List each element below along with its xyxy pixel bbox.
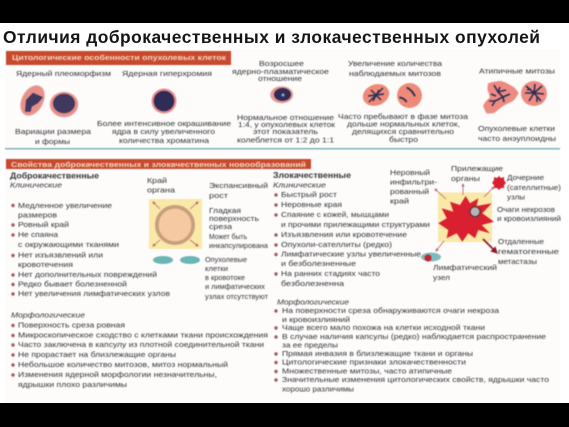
bullets: malignant morphological: Множественные митозы, часто атипичные bbox=[282, 366, 452, 376]
bullets: malignant morphological: хорошо различимы bbox=[282, 384, 354, 394]
icon: lymph node with metastasis bbox=[421, 252, 441, 262]
column: increased mitoses: дольше нормальных клеток, bbox=[347, 120, 460, 128]
labels: benign tumor: Экспансивный bbox=[209, 181, 268, 190]
labels: malignant tumor: Отдаленные bbox=[498, 237, 544, 246]
bullets: malignant clinical: На ранних стадиях часто bbox=[281, 269, 380, 278]
labels: tumor cells: узлах отсутствуют bbox=[205, 292, 269, 301]
labels: tumor cells: Опухолевые bbox=[205, 255, 247, 264]
bullets: malignant morphological: Прямая инвазия в близлежащие ткани и органы bbox=[282, 349, 473, 358]
column: nuclear hyperchromia bbox=[97, 69, 231, 145]
bullets: benign morphological: Небольшое количество митозов, митоз нормальный bbox=[18, 360, 228, 369]
bullets: malignant morphological: На поверхности среза обнаруживаются очаги некроза bbox=[282, 306, 500, 315]
labels: malignant tumor: узел bbox=[433, 273, 450, 282]
column: increased mitoses: наблюдаемых митозов bbox=[349, 69, 441, 78]
labels: malignant tumor: инфильтри- bbox=[390, 178, 438, 186]
icon: metaphase cell bbox=[360, 81, 392, 109]
labels: malignant tumor: метастазы bbox=[498, 257, 537, 266]
bullets: benign clinical: Нет изъязвлений или bbox=[18, 250, 103, 260]
diagram: benign tumor bbox=[147, 176, 269, 301]
labels: benign tumor: рост bbox=[209, 191, 229, 200]
labels: malignant tumor bbox=[390, 164, 561, 282]
column: nuclear-cytoplasmic ratio bbox=[232, 59, 336, 144]
panel: malignant: Морфологические bbox=[277, 298, 349, 306]
diagram: benign tumor: Край bbox=[147, 176, 167, 185]
icon: tumor star bbox=[438, 196, 494, 242]
bullets: benign morphological: Поверхность среза ровная bbox=[18, 320, 125, 330]
column: nuclear-cytoplasmic ratio: колеблется от 1:2 до 1:1 bbox=[237, 136, 334, 144]
column: atypical mitoses bbox=[478, 66, 556, 143]
icon: lymph nodes bbox=[153, 256, 200, 264]
bullets: malignant morphological: за ее пределы bbox=[282, 340, 338, 350]
column: increased mitoses: делящихся сравнительно bbox=[352, 127, 454, 136]
column: nuclear-cytoplasmic ratio: 1:4, у опухолевых клеток bbox=[238, 120, 336, 129]
column: nuclear hyperchromia: количества хроматина bbox=[119, 136, 210, 145]
labels: benign tumor: Может быть bbox=[209, 232, 247, 241]
bullets: malignant morphological: Значительные изменения цитологических свойств, ядрышки часто bbox=[282, 375, 549, 384]
bullets: benign clinical: с окружающими тканями bbox=[18, 240, 119, 249]
labels: malignant tumor: Прилежащие bbox=[451, 164, 503, 173]
column: nuclear hyperchromia: Более интенсивное окрашивание bbox=[97, 119, 231, 128]
labels: malignant tumor: Лимфатический bbox=[433, 263, 497, 272]
arrow: distant metastases bbox=[483, 239, 496, 252]
bullets: benign clinical bbox=[11, 201, 170, 298]
icon: irregular cell bbox=[16, 81, 49, 120]
bullets: benign clinical: Ровный край bbox=[18, 220, 69, 229]
diagram: benign tumor: органа bbox=[147, 186, 176, 194]
bullets: benign clinical: Медленное увеличение bbox=[18, 201, 112, 210]
labels: benign tumor: поверхность bbox=[209, 214, 259, 223]
column: nuclear-cytoplasmic ratio: Возросшее bbox=[259, 59, 304, 68]
bullets: benign morphological: ядрышки плохо различимы bbox=[18, 380, 127, 389]
column: nuclear pleomorphism bbox=[15, 69, 111, 146]
column: nuclear hyperchromia: ядра в силу увеличенного bbox=[112, 127, 215, 136]
bullets: malignant clinical bbox=[274, 190, 430, 288]
icon: hyperchromic cell bbox=[152, 88, 176, 114]
panel: malignant: Клинические bbox=[273, 180, 326, 190]
bullets: malignant clinical: безболезненна bbox=[281, 279, 345, 288]
labels: malignant tumor: рованный bbox=[390, 187, 429, 196]
bullets: benign clinical: Не спаяна bbox=[18, 230, 59, 239]
labels: benign tumor bbox=[209, 181, 269, 250]
column: increased mitoses bbox=[338, 59, 469, 144]
panel: malignant: Злокачественные bbox=[273, 171, 352, 180]
labels: benign tumor: Гладкая bbox=[209, 206, 241, 215]
bullets: benign morphological bbox=[11, 320, 268, 389]
labels: malignant tumor: край bbox=[390, 196, 409, 206]
panel: benign: Доброкачественные bbox=[10, 172, 100, 180]
panel: malignant bbox=[273, 171, 549, 394]
column: increased mitoses: Часто пребывают в фазе митоза bbox=[338, 112, 469, 121]
labels: benign tumor: среза bbox=[209, 222, 233, 231]
panel: cytological features bbox=[6, 51, 556, 146]
icon: satellite node bbox=[492, 176, 506, 190]
labels: benign tumor: инкапсулирована bbox=[209, 241, 269, 250]
bullets: benign clinical: Нет увеличения лимфатических узлов bbox=[18, 289, 170, 298]
bullets: malignant clinical: и прочими прилежащими структурами bbox=[281, 220, 430, 229]
labels: malignant tumor: (сателлитные) bbox=[507, 183, 561, 192]
bullets: malignant morphological: В случае наличия капсулы (редко) наблюдается распространение bbox=[282, 332, 546, 341]
diagram: malignant tumor bbox=[390, 164, 561, 282]
column: nuclear pleomorphism: и формы bbox=[35, 137, 70, 146]
icon: atypical mitosis lobed cell bbox=[483, 81, 519, 114]
labels: tumor cells: в кровотоке bbox=[205, 273, 245, 282]
column: atypical mitoses: Атипичные митозы bbox=[479, 66, 555, 76]
bullets: benign morphological: Часто заключена в капсулу из плотной соединительной ткани bbox=[18, 340, 264, 349]
title: Отличия доброкачественных и злокачественных опухолей bbox=[3, 27, 540, 47]
column: atypical mitoses: часто анэуплоидны bbox=[478, 134, 556, 143]
column: increased mitoses: Увеличение количества bbox=[348, 59, 443, 68]
panel: benign: Клинические bbox=[10, 180, 62, 190]
bullets: benign clinical: Нет дополнительных повреждений bbox=[18, 270, 157, 279]
labels: tumor cells: клетки bbox=[205, 264, 228, 273]
bullets: malignant morphological: Чаще всего мало похожа на клетки исходной ткани bbox=[282, 323, 485, 332]
icon: anaphase cell bbox=[397, 83, 422, 108]
panel: benign: Морфологические bbox=[11, 310, 85, 320]
icon: atypical mitosis round cell bbox=[521, 81, 547, 106]
labels: malignant tumor: органы bbox=[451, 174, 480, 183]
labels: malignant tumor: Неровный bbox=[390, 168, 430, 177]
column: nuclear-cytoplasmic ratio: этот показатель bbox=[253, 127, 318, 136]
heading bar: cytological features: Цитологические особенности опухолевых клеток bbox=[12, 53, 226, 62]
heading bar: properties: Свойства доброкачественных и злокачественных новообразований bbox=[11, 160, 306, 169]
bullets: malignant clinical: Лимфатические узлы увеличенные bbox=[281, 250, 421, 258]
bullets: malignant clinical: Изъязвления или кровотечение bbox=[281, 230, 407, 239]
bullets: malignant morphological: Цитологические признаки злокачественности bbox=[282, 358, 466, 366]
panel: benign bbox=[10, 172, 268, 389]
icon: necrosis focus bbox=[470, 207, 480, 217]
bullets: benign clinical: размеров bbox=[18, 210, 57, 220]
column: atypical mitoses: Опухолевые клетки bbox=[478, 124, 555, 133]
labels: tumor cells bbox=[205, 255, 269, 301]
bullets: malignant morphological: и кровоизлияний bbox=[282, 315, 350, 324]
icon: high ratio cell bbox=[270, 86, 293, 103]
bullets: malignant clinical: Быстрый рост bbox=[281, 190, 338, 199]
bullets: benign clinical: Редко бывает болезненной bbox=[18, 280, 127, 288]
column: nuclear-cytoplasmic ratio: ядерно-плазматическое bbox=[232, 67, 329, 76]
labels: malignant tumor: Очаги некрозов bbox=[497, 205, 555, 214]
column: nuclear pleomorphism: Ядерный плеоморфизм bbox=[16, 69, 111, 78]
bullets: malignant clinical: Спаяние с кожей, мышцами bbox=[281, 210, 389, 219]
bullets: benign morphological: Не прорастает на близлежащие органы bbox=[18, 350, 176, 359]
bullets: benign morphological: Микроскопическое сходство с клетками ткани происхождения bbox=[18, 330, 268, 340]
bullets: malignant morphological bbox=[274, 306, 549, 394]
column: nuclear-cytoplasmic ratio: отношение bbox=[258, 74, 302, 83]
labels: malignant tumor: и кровоизлияний bbox=[497, 214, 561, 223]
arrows bbox=[435, 184, 494, 251]
bullets: malignant clinical: Опухоли-сателлиты (редко) bbox=[281, 240, 392, 249]
labels: malignant tumor: гематогенные bbox=[498, 247, 559, 256]
column: nuclear hyperchromia: Ядерная гиперхромия bbox=[122, 69, 212, 78]
column: nuclear pleomorphism: Вариации размера bbox=[15, 127, 92, 136]
heading bar: cytological features bbox=[6, 51, 231, 65]
column: increased mitoses: быстро bbox=[389, 135, 418, 144]
bullets: benign morphological: Изменения ядерной морфологии незначительны, bbox=[18, 370, 217, 379]
bullets: benign clinical: кровотечения bbox=[18, 260, 73, 269]
icon: enlarged nucleus cell bbox=[50, 92, 78, 117]
labels: malignant tumor: узлы bbox=[507, 192, 525, 202]
column: nuclear-cytoplasmic ratio: Нормальное отношение bbox=[237, 113, 334, 122]
labels: tumor cells: и лимфатических bbox=[205, 282, 265, 291]
bullets: malignant clinical: Неровные края bbox=[281, 200, 342, 209]
bullets: malignant clinical: и безболезненные bbox=[281, 259, 356, 268]
labels: malignant tumor: Дочерние bbox=[507, 173, 544, 182]
